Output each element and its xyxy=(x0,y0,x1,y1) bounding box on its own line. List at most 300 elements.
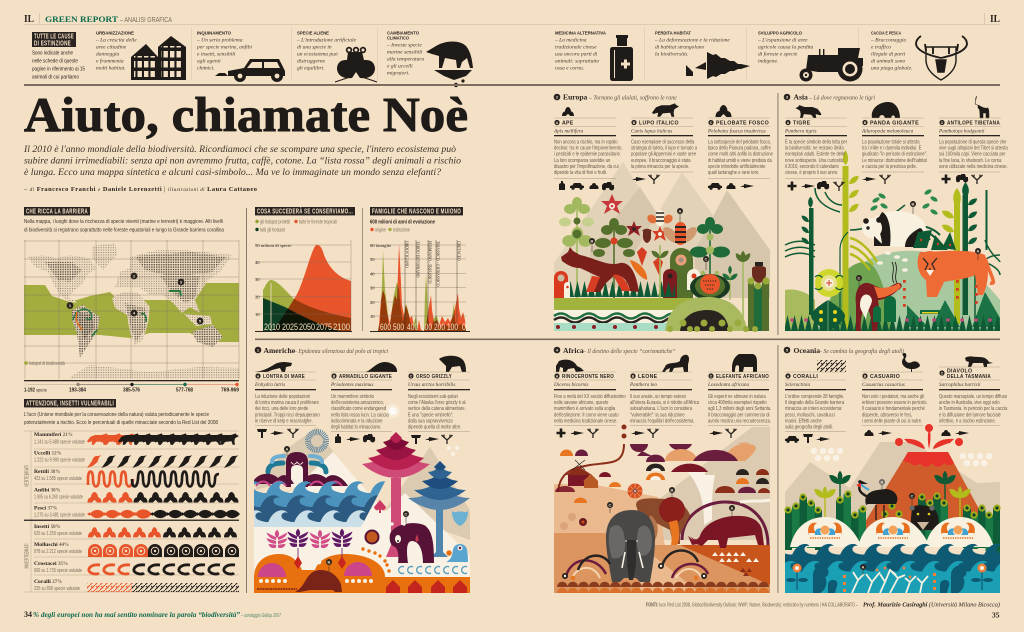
card: Diavolo della Tasmania: C xyxy=(941,371,944,375)
card: Leone: subsahariana. L'Iucn lo considera xyxy=(630,406,692,412)
scene markers xyxy=(589,208,709,270)
small leaves xyxy=(870,188,938,216)
heading: Europa: 2 xyxy=(556,94,559,100)
scene markers xyxy=(607,487,735,517)
strip: causes of extinction xyxy=(32,28,967,87)
card: Rinoceronte nero: nella medicina tradizionale cinese. xyxy=(554,418,618,425)
animal: wolf xyxy=(652,103,679,117)
cause: medicina alternativa: – La medicina xyxy=(555,38,586,44)
card: Leone: minaccia l'equilibri dell'ecosistema. xyxy=(630,418,694,425)
right dome xyxy=(665,297,747,331)
panel: Americhe xyxy=(254,346,470,593)
spike chart xyxy=(370,240,470,333)
card: Ape: i pesticidi e le epidemie parassitarie. xyxy=(554,151,621,158)
heading: Africa xyxy=(554,346,676,355)
card: Diavolo della Tasmania: anche in Australia, vive oggi solo xyxy=(939,400,1000,406)
card: Orso grizzly: dalla sua sopravvivenza xyxy=(408,418,453,425)
row: pesci xyxy=(34,506,240,519)
x axis years: 2025 xyxy=(282,322,298,333)
card: Casuario: CASUARIO xyxy=(870,374,900,380)
extinction event labels: PERMIANO - TRIASSICO xyxy=(428,241,432,284)
card: Lontra di mare: A xyxy=(257,374,260,378)
cause: sviluppo agricolo: indigene. xyxy=(758,58,778,64)
card: Casuario: Il casuario è fondamentale perché xyxy=(862,406,925,412)
card: Orso grizzly: vertice della catena alimentare. xyxy=(408,406,466,412)
card: Elefante africano: agli 1,3 milioni degli anni Settanta. xyxy=(708,406,771,412)
map description: Nella mappa, i luoghi dove la ricchezza di specie viventi (marine e terrestri) è maggiore. Alti livelli xyxy=(24,219,223,225)
card: Pelobate fosco: C xyxy=(710,121,713,125)
white dots xyxy=(811,448,992,466)
card: Rinoceronte nero: mammifero è arrivato sulla soglia xyxy=(554,406,615,412)
heading: Europa: – Tornano gli ululati, soffrono le rane xyxy=(588,94,677,102)
volcano xyxy=(862,424,985,545)
card: Casuario: erbivori possono essere in pericolo. xyxy=(862,400,928,406)
road xyxy=(558,444,624,492)
wolf xyxy=(561,247,647,292)
sun xyxy=(308,432,326,450)
icon: polar bear on ice xyxy=(426,42,473,87)
orange ground xyxy=(254,554,470,593)
cause: cambiamento climatico: – Investe specie xyxy=(387,42,422,48)
axis labels xyxy=(370,243,466,333)
heading: Americhe xyxy=(255,346,389,355)
cause: medicina alternativa: animali: soprattutto xyxy=(555,58,599,64)
row: coralli xyxy=(34,579,239,592)
card: Diavolo della Tasmania: infettivo, è a rischio estinzione. xyxy=(939,418,996,425)
map markers: 4 xyxy=(133,310,136,316)
card: Tigre: È la specie simbolo della lotta per xyxy=(785,140,847,146)
y axis labels: 40 xyxy=(255,260,260,265)
cause: perdita habitat: di habitat strangolano xyxy=(655,44,704,50)
land masses xyxy=(28,243,239,378)
chart legend: gli hotspot protetti xyxy=(260,220,290,226)
card: Diavolo della Tasmania xyxy=(939,356,1008,436)
map markers: 2 xyxy=(133,274,136,278)
row: anfibi xyxy=(34,488,238,502)
icon: car xyxy=(215,59,285,82)
chart legend: tutte le foreste tropicali xyxy=(299,220,337,226)
card: Rinoceronte nero xyxy=(553,360,626,438)
illustration: Africa scene xyxy=(554,424,770,593)
sea otter xyxy=(286,452,308,487)
heading: tutte le cause: pagine in riferimento ai 15 xyxy=(32,66,85,72)
cause: perdita habitat xyxy=(654,30,750,79)
card: Pelobate fosco: di habitat umidi e viene predata da xyxy=(708,157,772,164)
footer: survey note: – sondaggio Gallup 2007 xyxy=(240,613,282,619)
hotspot legend xyxy=(24,361,65,367)
card: Armadillo gigante: degli habitat lo minacciano. xyxy=(331,424,381,431)
icon: houses xyxy=(131,36,186,80)
card: Pelobate fosco: come molti altri anfibi la distruzione xyxy=(708,151,773,158)
x axis years xyxy=(264,322,350,333)
card: Ape: La loro scomparsa sarebbe un xyxy=(554,157,611,164)
card: Coralli: pesci, molluschi, cavallucci xyxy=(785,412,835,419)
cause: medicina alternativa: MEDICINA ALTERNATIVA xyxy=(555,30,607,36)
species richness scale: 385-576 xyxy=(123,388,140,394)
card: Pelobate fosco: tipica della Pianura padana, soffre xyxy=(708,145,771,152)
card: Lupo italico: LUPO ITALICO xyxy=(639,120,679,126)
heading: Oceania: 5 xyxy=(786,348,789,352)
x axis years: 2100 xyxy=(333,322,350,333)
heading: tutte le cause: Sono indicate anche xyxy=(32,50,73,56)
card: Armadillo gigante: Priodontes maximus xyxy=(330,382,374,388)
animal: rhino xyxy=(556,360,584,372)
panda xyxy=(862,211,926,247)
card: Diavolo della Tasmania: e la diffusione del tumore facciale xyxy=(939,412,1001,419)
axis labels: 30 xyxy=(370,286,375,290)
legend: estinzione xyxy=(393,228,410,234)
card: Armadillo gigante: indiscriminata e la riduzione xyxy=(331,418,383,425)
footer: sources and credits: FONTI: Iucn Red List 2008, Global Biodiversity Outlook; WWF; Nature, Biodiversity: extinction by numbers | HA COLLABORATO – xyxy=(646,602,858,608)
cause: sviluppo agricolo xyxy=(757,30,863,82)
card: Lontra di mare: LONTRA DI MARE xyxy=(263,374,305,380)
cause: inquinamento: INQUINAMENTO xyxy=(197,30,231,36)
row: mammiferi: Mammiferi 21% xyxy=(34,432,73,438)
page number: 35 xyxy=(992,610,1000,620)
card: Tigre: A xyxy=(787,121,790,125)
cause: inquinamento: per specie marine, anfibi xyxy=(196,44,252,50)
heading: Oceania: Oceania xyxy=(794,346,820,355)
cause: cambiamento climatico: CAMBIAMENTO xyxy=(387,30,419,36)
seahorses xyxy=(813,565,966,593)
card: Rinoceronte nero: A xyxy=(556,374,559,378)
card: Elefante africano: C xyxy=(710,374,713,378)
scene markers: B xyxy=(591,238,594,243)
heading: che ricca la barriera: CHE RICCA LA BARRIERA xyxy=(26,209,88,216)
footer: survey note: % degli europei non ha mai sentito nominare la parola “biodiversità” xyxy=(33,611,240,619)
map markers: 1 xyxy=(69,303,72,308)
white triangles xyxy=(712,552,759,562)
card: Panda gigante: Le minacce: distruzione dell'habitat xyxy=(862,157,927,164)
card: Antilope tibetana: sono utilizzate nella medicina cinese. xyxy=(939,163,1008,170)
grey elephant xyxy=(606,510,655,582)
cause: caccia e pesca: illegale di parti xyxy=(871,52,906,58)
row: insetti xyxy=(34,524,237,537)
rhino arc xyxy=(682,502,768,545)
card: Lontra di mare: di lontra marina causa il proliferare xyxy=(255,400,319,406)
vulnerable description: potenzialmente a rischio. Ecco le percentuali di quelle minacciate secondo la Red List del 2008 xyxy=(24,420,218,426)
intro text: è lunga. Ecco una mappa sintetica e alcuni casi-simbolo... Ma ve lo immaginate un mondo senza elefanti? xyxy=(24,167,441,178)
card: Antilope tibetana: sui 100mila capi. Viene cacciata per xyxy=(939,151,1006,158)
vulnerable description: L'Iucn (Unione mondiale per la conservazione della natura) valuta periodicamente le specie xyxy=(24,412,209,418)
card: Antilope tibetana: vive sugli altopiani del Tibet si attesta xyxy=(939,145,1008,152)
card: Lupo italico: Caso esemplare di successo della xyxy=(631,140,694,146)
card: Pelobate fosco: quali tartarughe e rane toro. xyxy=(708,169,759,176)
x axis years: 2050 xyxy=(299,322,315,333)
cause: cambiamento climatico xyxy=(386,30,473,87)
card: Lontra di mare xyxy=(254,362,320,438)
row: uccelli: 1.222 su 9.990 specie valutate xyxy=(34,458,85,464)
card: Rinoceronte nero: Fino a metà del XX secolo diffusissimo xyxy=(554,395,626,400)
card: Panda gigante: B xyxy=(864,121,867,125)
card: Rinoceronte nero: RINOCERONTE NERO xyxy=(562,374,614,380)
axis labels: 20 xyxy=(370,300,375,305)
card: Lupo italico: strategia di tutela, il lupo è tornato a xyxy=(631,145,697,152)
striped triangles xyxy=(907,292,1000,327)
card: Leone: Il suo areale, un tempo esteso xyxy=(630,395,686,400)
card: Tigre: cinese, è proprio il suo anno. xyxy=(785,169,838,176)
curved fronds xyxy=(785,188,1000,325)
card: Elefante africano xyxy=(707,354,771,438)
row: mammiferi: 1.141 su 5.488 specie valutate xyxy=(34,440,85,446)
heading: Africa: – Il destino delle specie “carismatiche” xyxy=(582,348,676,355)
leaf diamond xyxy=(811,300,845,331)
ferns xyxy=(267,529,352,569)
card: Armadillo gigante: ARMADILLO GIGANTE xyxy=(339,374,392,380)
cause: specie aliene: gli equilibri. xyxy=(297,66,324,72)
species richness scale: 577-768 xyxy=(176,388,193,394)
card: Leone: all'intera Eurasia, si è ridotto all'Africa xyxy=(630,400,699,406)
card: Antilope tibetana: ANTILOPE TIBETANA xyxy=(947,120,1000,126)
animal: coral xyxy=(817,360,846,372)
card: Lupo italico: europee. Il bracconaggio è stata xyxy=(631,157,691,164)
animal: elephant xyxy=(732,354,757,372)
row: insetti: Insetti 50% xyxy=(34,524,61,530)
cause: medicina alternativa xyxy=(554,30,633,81)
animal: tiger xyxy=(796,105,822,118)
heading: Asia: Asia xyxy=(794,92,808,102)
cause: caccia e pesca xyxy=(870,30,967,80)
card: Ape: disastro per l'impollinazione, da cui xyxy=(554,163,619,170)
cause: sviluppo agricolo: SVILUPPO AGRICOLO xyxy=(758,30,802,36)
intro text: subire danni irrimediabili: senza api non avremmo frutta, caffè, cotone. La “lista rossa” degli animali a rischio xyxy=(24,156,461,166)
blue tree xyxy=(408,461,470,557)
heading: tutte le cause: nelle schede di queste xyxy=(32,58,78,64)
scene markers: C xyxy=(609,502,612,507)
tubes xyxy=(784,490,1001,553)
card: Casuario: B xyxy=(864,374,867,378)
card: Tigre: la biodiversità: ne restano 3mila xyxy=(785,145,844,152)
species richness scale: 1-192 specie xyxy=(24,388,47,394)
vulnerable description xyxy=(24,412,218,426)
card: Orso grizzly: dipende quella di molte altre. xyxy=(408,424,461,431)
heading: tutte le cause: animali di cui parliamo xyxy=(32,74,79,80)
illustration: Asia scene xyxy=(785,150,1000,331)
bottom grass xyxy=(785,315,1000,331)
scene markers: C xyxy=(705,256,708,261)
card: Coralli xyxy=(785,360,846,443)
species richness scale: 769-969 xyxy=(221,388,239,394)
card: Coralli: CORALLI xyxy=(793,374,818,380)
card: Armadillo gigante: B xyxy=(333,374,336,378)
cause: medicina alternativa: ossa e corna. xyxy=(555,66,584,72)
cause: urbanizzazione: danneggia xyxy=(96,52,119,58)
tiger xyxy=(918,251,993,297)
extinction event labels: TARDO DEVONIANO xyxy=(416,241,420,278)
row: anfibi: Anfibi 30% xyxy=(34,488,61,494)
card: Lontra di mare: dei ricci, una delle loro prede xyxy=(255,406,309,412)
striped tents xyxy=(913,230,956,250)
ball xyxy=(364,530,380,544)
icon: frog xyxy=(335,47,377,82)
cause: urbanizzazione: aree cittadine xyxy=(96,44,127,50)
cause: specie aliene: un ecosistema può xyxy=(297,52,338,58)
animal: otter xyxy=(255,362,292,372)
card: Casuario: Casuarius casuarius xyxy=(862,382,905,388)
card: Coralli: sulla geografia degli atolli. xyxy=(785,424,833,431)
axis labels: 50 xyxy=(370,257,375,262)
card: Diavolo della Tasmania: DELLA TASMANIA xyxy=(947,374,991,380)
brown elephant xyxy=(636,497,690,545)
icon: stag trophy xyxy=(916,36,967,80)
card: Ape: Non ancora a rischio, ma in rapido xyxy=(554,140,618,146)
card: Pelobate fosco: specie introdotte artificialmente xyxy=(708,163,766,170)
bear xyxy=(390,522,434,563)
chart legend: tutti gli hotspot xyxy=(260,228,285,234)
card: Orso grizzly: È una "specie ombrello": xyxy=(408,411,453,419)
map grid xyxy=(24,240,239,379)
card: Elefante africano: avorio mostra una recrudescenza. xyxy=(708,418,771,425)
heading: Africa: Africa xyxy=(563,346,584,355)
scene markers: A xyxy=(286,446,289,451)
scene markers: C xyxy=(911,493,914,498)
illustration: Americhe scene xyxy=(254,404,470,593)
animal: Tasmanian devil xyxy=(965,356,993,367)
rainbows xyxy=(566,550,708,578)
tree xyxy=(671,442,756,525)
animal: bee xyxy=(562,107,574,116)
cause: specie aliene: di una specie in xyxy=(297,44,332,50)
card: Elefante africano: Gli esperti ne stimano in natura xyxy=(708,395,766,400)
row: uccelli: Uccelli 12% xyxy=(34,450,62,456)
domes xyxy=(560,444,697,480)
heading: Asia xyxy=(784,92,875,102)
hotspot marks xyxy=(73,291,181,336)
scene markers: C xyxy=(405,511,408,516)
scene markers xyxy=(860,479,915,575)
cause: sviluppo agricolo: di foreste e specie xyxy=(758,50,798,58)
orange flower xyxy=(628,484,642,498)
row: rettili: Rettili 38% xyxy=(34,469,60,475)
fountains xyxy=(268,456,326,472)
cause: sviluppo agricolo: – L'espansione di aree xyxy=(758,38,807,44)
card: Pelobate fosco: La sottospecie del pelobate fosco, xyxy=(708,140,771,146)
hotspot legend: hotspot di biodiversità xyxy=(29,361,65,367)
huts xyxy=(555,460,621,503)
footer: survey note: 34 xyxy=(24,610,32,619)
corals xyxy=(852,570,928,593)
species richness scale xyxy=(24,380,239,394)
row: molluschi: Molluschi 44% xyxy=(34,542,69,548)
panel: vulnerable species xyxy=(24,399,240,592)
card: Lupo italico: popolare gli Appennini e vaste aree xyxy=(631,151,696,158)
animal: antelope xyxy=(975,96,989,118)
cause: medicina alternativa: tradizionale cinese xyxy=(555,44,597,50)
row: rettili xyxy=(34,469,219,486)
row: rettili: 423 su 1.585 specie valutate xyxy=(34,476,82,482)
card: Coralli: Scleractinia xyxy=(785,382,810,388)
axis labels: 500 xyxy=(393,322,404,333)
card: Leone: B xyxy=(632,374,635,378)
heading: famiglie: FAMIGLIE CHE NASCONO E MUIONO xyxy=(372,209,461,216)
footer: sources and credits: Prof. Maurizio Casiraghi (Università Milano Bicocca) xyxy=(863,602,1000,608)
card: Orso grizzly: come l'Alaska l'orso grizzly è al xyxy=(408,400,465,406)
cause: caccia e pesca: CACCIA E PESCA xyxy=(871,30,902,36)
card: Tigre: nove sottospecie. Una curiosità: xyxy=(785,157,844,164)
card: Ape: declino: tra le cause l'impoverimento, xyxy=(554,145,623,152)
panel: Europa xyxy=(553,92,773,332)
cause: caccia e pesca: una piaga globale. xyxy=(871,66,912,72)
heading: tutte le cause: DI ESTINZIONE xyxy=(34,40,71,47)
card: Diavolo della Tasmania: DIAVOLO xyxy=(947,368,972,374)
grass xyxy=(570,281,675,297)
card: Coralli: minaccia un intero ecosistema: xyxy=(785,406,842,412)
cause: inquinamento: – Un serio problema xyxy=(197,38,242,44)
card: Lupo italico: la prima minaccia per la specie. xyxy=(631,163,689,170)
card: Panda gigante: La popolazione totale si attesta xyxy=(862,140,920,146)
tasmanian devil xyxy=(909,505,939,530)
card: Casuario: disperde, attraverso le feci, xyxy=(862,412,912,419)
illustration: Oceania scene xyxy=(784,424,1001,593)
page header: IL xyxy=(24,13,34,25)
card: Orso grizzly: ORSO GRIZZLY xyxy=(416,374,452,380)
card: Coralli: marini. Effetti anche xyxy=(785,418,822,425)
cause: cambiamento climatico: CLIMATICO xyxy=(387,36,409,40)
heading: Asia: 3 xyxy=(786,94,789,100)
legend: origine xyxy=(375,228,386,234)
card: Tigre: il 2010, secondo il calendario xyxy=(785,163,839,170)
card: Coralli: A xyxy=(787,374,790,378)
sea flowers xyxy=(786,564,993,590)
card: Rinoceronte nero: nelle savane africane, questo xyxy=(554,400,609,406)
map description: di biodiversità si registrano soprattutto nelle foreste equatoriali e lungo la Grande barriera corallina xyxy=(24,228,225,234)
card: Panda gigante: Ailuropoda melanoleuca xyxy=(861,128,914,134)
card: Ape: Apis mellifera xyxy=(553,128,584,134)
card: Orso grizzly: Negli ecosistemi sub-polari xyxy=(408,395,458,400)
extinction event labels: CRETACEO xyxy=(457,241,461,261)
card: Diavolo della Tasmania: Questo marsupiale, un tempo diffuso xyxy=(939,395,1007,400)
card: Lontra di mare: Enhydra lutris xyxy=(254,382,285,388)
card: Leone: Panthera leo xyxy=(629,382,657,388)
card: Pelobate fosco: PELOBATE FOSCO xyxy=(716,120,769,126)
heading: Americhe: 1 xyxy=(257,348,260,352)
axis labels: 40 xyxy=(370,272,375,276)
map markers: 5 xyxy=(199,318,202,324)
x axis years: 2075 xyxy=(316,322,332,333)
cause: specie aliene xyxy=(296,30,377,82)
antelope xyxy=(856,262,902,331)
scene markers: C xyxy=(858,275,861,280)
orange dot arc xyxy=(361,547,391,573)
byline: – di Francesco Franchi e Daniele Lorenzetti | illustrazioni di Laura Cattaneo xyxy=(23,186,257,193)
row: uccelli xyxy=(34,450,238,468)
x axis years: 2010 xyxy=(264,322,280,333)
axis labels: 60 famiglie xyxy=(370,243,391,248)
card: Lontra di mare: La riduzione delle popolazioni xyxy=(255,395,310,400)
cause: urbanizzazione: – La crescita delle xyxy=(96,38,137,44)
intro text xyxy=(23,145,461,178)
row: molluschi: 978 su 2.212 specie valutate xyxy=(34,549,82,555)
y axis labels: 30 xyxy=(255,277,260,282)
cause: cambiamento climatico: e gli uccelli xyxy=(387,64,413,70)
extinction event labels xyxy=(405,241,461,287)
card: Pelobate fosco: Pelobates fuscus insubricus xyxy=(707,128,766,134)
row: pesci: Pesci 37% xyxy=(34,506,58,512)
panel: origins and extinctions chart xyxy=(370,207,470,333)
card: Antilope tibetana: Pantholops hodgsonii xyxy=(938,128,985,134)
card: Leone xyxy=(629,355,699,438)
axis labels: 600 xyxy=(380,322,391,333)
waves xyxy=(254,474,388,527)
plants xyxy=(812,471,973,520)
row: mammiferi xyxy=(34,432,239,446)
card: Diavolo della Tasmania: Sarcophilus harrisii xyxy=(939,382,981,388)
heading: Oceania: – Se cambia la geografia degli atolli xyxy=(818,348,904,355)
card: Elefante africano: circa 400mila esemplari rispetto xyxy=(708,400,767,406)
sea xyxy=(785,541,1000,593)
card: Coralli: Il degrado della Grande barriera xyxy=(785,400,844,406)
extinction event labels: TRIASSICO - GIURASSICO xyxy=(436,241,440,287)
